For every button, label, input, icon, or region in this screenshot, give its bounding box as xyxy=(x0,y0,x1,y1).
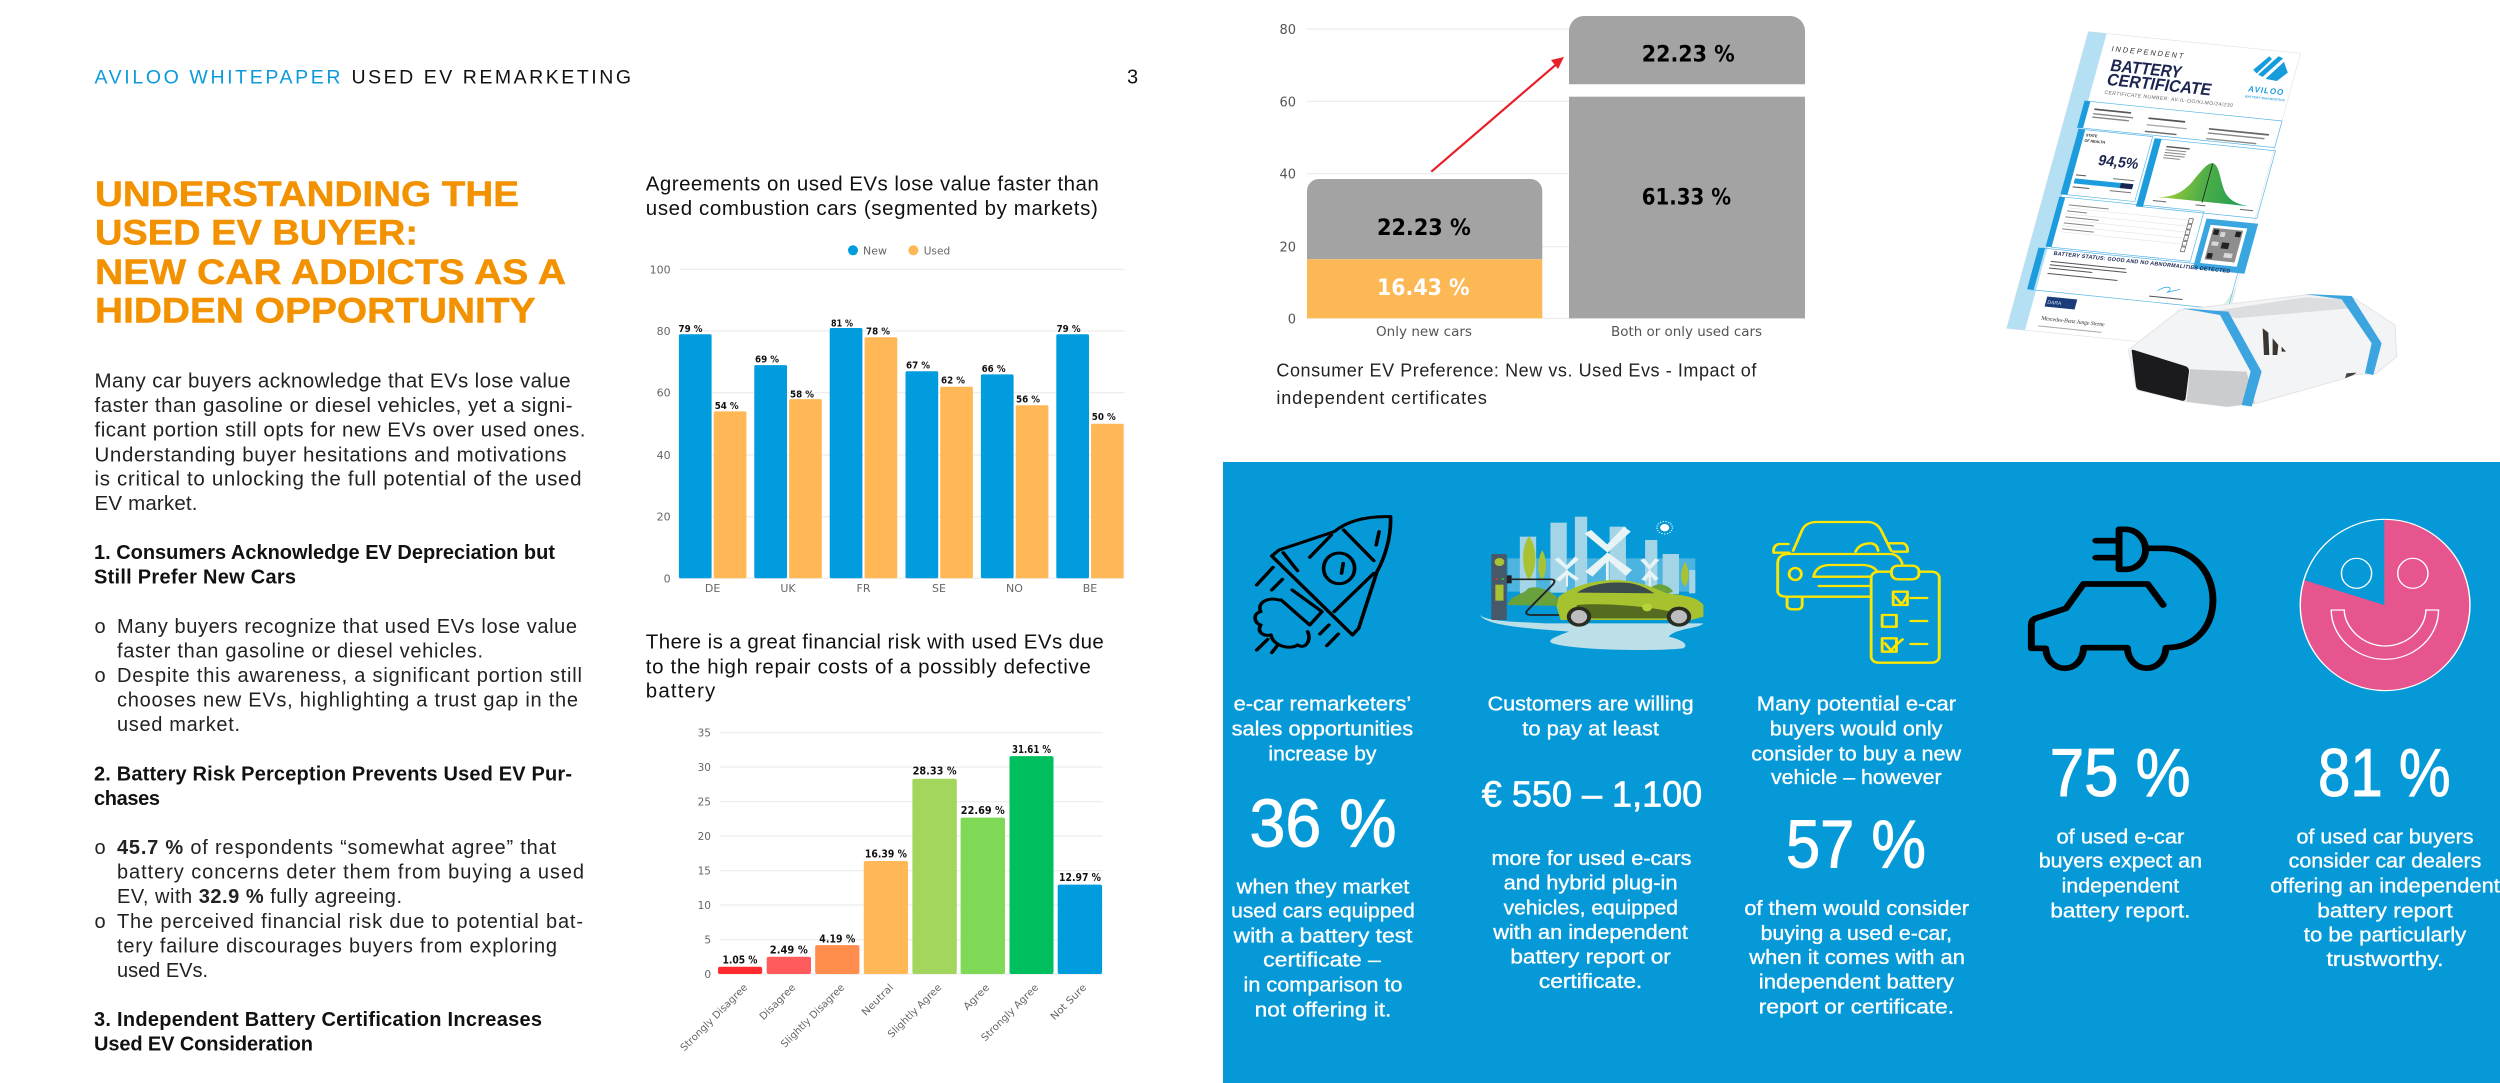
value labels xyxy=(722,744,1101,966)
illustration: battery certificate: CERTIFICATE xyxy=(2105,70,2214,99)
value labels: 31.61 % xyxy=(1012,744,1051,756)
stat column 1: 36 %: used cars equipped xyxy=(1231,901,1415,923)
bar chart: agreements by market xyxy=(650,244,1124,595)
value labels: 12.97 % xyxy=(1059,872,1101,884)
rotated category labels: Slightly Disagree xyxy=(779,982,847,1050)
chart legend xyxy=(848,244,950,257)
y axis labels xyxy=(1279,23,1296,328)
section 2 bullets: o xyxy=(94,911,106,933)
x axis labels: DE xyxy=(705,582,720,595)
y axis labels: 60 xyxy=(657,387,671,400)
chart caption xyxy=(1276,361,1757,408)
illustration: battery test device xyxy=(2128,294,2397,407)
rotated category labels: Not Sure xyxy=(1049,982,1089,1023)
y axis labels: 20 xyxy=(1279,240,1296,256)
page header: USED EV REMARKETING xyxy=(352,66,631,88)
stat column 3: 57 %: report or certificate. xyxy=(1759,996,1954,1018)
section 1 bullets: faster than gasoline or diesel vehicles. xyxy=(117,641,483,663)
stat column 1: 36 %: 36 % xyxy=(1250,786,1396,862)
y axis labels: 80 xyxy=(657,325,671,338)
section 2 heading: chases xyxy=(94,788,160,810)
title: NEW CAR ADDICTS AS A xyxy=(95,252,566,292)
stat column 1: 36 %: when they market xyxy=(1236,876,1410,898)
illustration: battery certificate: OF HEALTH xyxy=(2084,139,2106,145)
rotated category labels: Neutral xyxy=(860,982,896,1018)
section 1 bullets: o xyxy=(94,665,106,687)
stat column 3: 57 %: buying a used e-car, xyxy=(1761,923,1952,945)
title: USED EV BUYER: xyxy=(95,213,418,253)
value labels xyxy=(678,318,1116,423)
section 2 heading: 2. Battery Risk Perception Prevents Used EV Pur- xyxy=(94,763,572,785)
value labels: 56 % xyxy=(1016,395,1040,406)
stat column 1: 36 %: e-car remarketers’ xyxy=(1234,694,1411,716)
x axis labels: SE xyxy=(932,582,946,595)
stat column 4: 75 %: independent xyxy=(2062,876,2180,898)
panel: statistics xyxy=(1223,462,2500,1083)
stat column 5: 81 % xyxy=(2270,735,2500,971)
chart 1 heading: used combustion cars (segmented by markets) xyxy=(646,197,1098,220)
rotated category labels: Disagree xyxy=(758,982,798,1023)
bar: both or only used cars: 22.23 % xyxy=(1642,41,1735,67)
stat column 3: 57 %: Many potential e-car xyxy=(1757,694,1956,716)
icon: rocket xyxy=(1255,517,1391,653)
bar: both or only used cars xyxy=(1569,16,1805,318)
section 2 bullets: EV, with 32.9 % fully agreeing. xyxy=(117,886,402,908)
section 3 heading: Used EV Consideration xyxy=(94,1034,313,1056)
chart 2 heading: battery xyxy=(646,679,716,702)
intro paragraph: is critical to unlocking the full potential of the used xyxy=(94,468,582,491)
stat column 5: 81 %: of used car buyers xyxy=(2296,826,2474,848)
y axis labels: 5 xyxy=(704,935,711,947)
stat column 4: 75 % xyxy=(2039,735,2202,922)
y axis labels: 30 xyxy=(698,762,711,774)
y axis labels xyxy=(698,728,711,981)
y axis labels xyxy=(650,263,671,585)
stat column 1: 36 %: certificate – xyxy=(1263,950,1382,972)
y axis labels: 10 xyxy=(698,900,711,912)
value labels: 81 % xyxy=(831,318,853,329)
value labels: 62 % xyxy=(941,375,965,386)
chart legend: New xyxy=(863,244,887,257)
title: UNDERSTANDING THE xyxy=(95,174,519,214)
rotated category labels: Strongly Disagree xyxy=(679,982,750,1054)
y axis labels: 0 xyxy=(1288,312,1296,328)
y axis labels: 60 xyxy=(1279,96,1296,110)
section 2 heading xyxy=(94,763,572,810)
chart 1 heading xyxy=(646,173,1099,220)
stat column 3: 57 %: vehicle – however xyxy=(1771,767,1942,789)
section 2 bullets: battery concerns deter them from buying a used xyxy=(117,862,584,884)
x axis labels: BE xyxy=(1083,582,1097,595)
x axis labels xyxy=(1376,325,1762,340)
value labels: 2.49 % xyxy=(770,944,808,956)
y axis labels: 40 xyxy=(657,449,671,462)
value labels: 22.69 % xyxy=(961,805,1005,817)
arrow: shift towards used cars xyxy=(1431,57,1564,172)
y axis labels: 0 xyxy=(704,969,711,981)
value labels: 69 % xyxy=(755,354,779,365)
stat column 4: 75 %: buyers expect an xyxy=(2039,851,2202,873)
stat column 2: price premium: Customers are willing xyxy=(1488,694,1694,716)
section 3 heading xyxy=(94,1009,542,1056)
section 1 bullets: chooses new EVs, highlighting a trust gap in the xyxy=(117,690,578,712)
bar: only new cars xyxy=(1307,179,1542,318)
value labels: 79 % xyxy=(1057,324,1081,335)
x axis labels: UK xyxy=(780,582,796,595)
section 2 bullets: 45.7 % of respondents “somewhat agree” that xyxy=(117,837,556,859)
section 1 heading: 1. Consumers Acknowledge EV Depreciation but xyxy=(94,542,555,564)
stat column 2: price premium: certificate. xyxy=(1539,971,1642,993)
illustration: battery certificate: INDEPENDENT xyxy=(2111,44,2185,60)
chart 2 heading xyxy=(646,630,1104,702)
stat column 1: 36 %: in comparison to xyxy=(1244,975,1402,997)
page header: 3 xyxy=(1127,66,1138,88)
section 1 heading: Still Prefer New Cars xyxy=(94,567,296,589)
y axis labels: 25 xyxy=(698,797,711,809)
illustration: battery certificate: BATTERY STATUS: GOOD AND NO ABNORMALITIES DETECTED xyxy=(2053,251,2231,275)
rotated category labels: Strongly Agree xyxy=(980,982,1041,1044)
illustration: battery certificate: BATTERY DIAGNOSTICS xyxy=(2245,94,2285,102)
intro paragraph: EV market. xyxy=(94,492,198,515)
bar: only new cars: 22.23 % xyxy=(1377,215,1471,241)
illustration: battery certificate: 94,5% xyxy=(2096,152,2141,173)
value labels: 1.05 % xyxy=(722,954,758,966)
x axis labels: Both or only used cars xyxy=(1611,325,1762,340)
stat column 5: 81 %: to be particularly xyxy=(2304,925,2466,947)
icon: smiley pie chart xyxy=(2300,519,2470,691)
section 2 bullets: used EVs. xyxy=(117,960,208,982)
intro paragraph: Understanding buyer hesitations and motivations xyxy=(94,443,566,466)
chart legend: Used xyxy=(924,244,950,257)
stat column 3: 57 %: 57 % xyxy=(1786,806,1926,882)
value labels: 50 % xyxy=(1092,412,1116,423)
section 1 bullets: Many buyers recognize that used EVs lose value xyxy=(117,616,577,638)
x axis labels: FR xyxy=(857,582,871,595)
bar: both or only used cars: 61.33 % xyxy=(1642,184,1731,210)
stat column 5: 81 %: 81 % xyxy=(2318,735,2451,811)
section 2 bullets: tery failure discourages buyers from exploring xyxy=(117,936,557,958)
value labels: 28.33 % xyxy=(913,766,957,778)
stat column 1: 36 %: not offering it. xyxy=(1255,999,1391,1021)
chart caption: independent certificates xyxy=(1276,388,1487,408)
value labels: 4.19 % xyxy=(819,933,856,945)
page header: AVILOO WHITEPAPER xyxy=(94,66,340,88)
section 1 bullets: o xyxy=(94,616,106,638)
stat column 3: 57 %: of them would consider xyxy=(1744,898,1969,920)
bars xyxy=(679,328,1124,578)
stat column 3: 57 %: consider to buy a new xyxy=(1751,743,1962,765)
stat column 1: 36 %: increase by xyxy=(1268,743,1376,765)
chart 1 heading: Agreements on used EVs lose value faster than xyxy=(646,173,1099,196)
bar chart: financial risk agreement xyxy=(679,728,1103,1054)
stat column 3: 57 %: when it comes with an xyxy=(1748,947,1965,969)
stat column 2: price premium: € 550 – 1,100 xyxy=(1482,774,1702,815)
x axis labels: Only new cars xyxy=(1376,325,1472,340)
y axis labels: 40 xyxy=(1279,168,1296,182)
chart caption: Consumer EV Preference: New vs. Used Evs - Impact of xyxy=(1276,361,1757,381)
stacked bar chart: new vs used preference xyxy=(1279,16,1805,340)
illustration: battery certificate: STATE xyxy=(2085,133,2098,138)
icon: car with checklist xyxy=(1774,522,1939,663)
stat column 5: 81 %: consider car dealers xyxy=(2289,851,2481,873)
illustration: battery certificate: CERTIFICATE NUMBER: AV-IL-OO/KLMO/24/230 xyxy=(2104,90,2234,109)
stat column 4: 75 %: battery report. xyxy=(2050,900,2190,922)
y axis labels: 0 xyxy=(664,572,671,585)
y axis labels: 20 xyxy=(657,511,671,524)
title: HIDDEN OPPORTUNITY xyxy=(95,291,536,331)
chart 2 heading: to the high repair costs of a possibly defective xyxy=(646,655,1091,678)
illustration: battery certificate: AVILOO xyxy=(2247,85,2285,97)
intro paragraph: Many car buyers acknowledge that EVs lose value xyxy=(94,370,570,393)
y axis labels: 100 xyxy=(650,263,671,276)
y axis labels: 35 xyxy=(698,728,711,740)
icon: electric car at charging station xyxy=(1480,517,1703,650)
illustration: battery certificate: DARA xyxy=(2046,300,2063,307)
stat column 3: 57 %: buyers would only xyxy=(1770,719,1942,741)
section 1 heading xyxy=(94,542,555,589)
intro paragraph: ficant portion still opts for new EVs over used ones. xyxy=(94,419,586,442)
stat column 1: 36 %: sales opportunities xyxy=(1232,719,1413,741)
stat column 5: 81 %: offering an independent xyxy=(2270,876,2500,898)
bars xyxy=(718,756,1102,974)
stat column 4: 75 %: 75 % xyxy=(2050,735,2191,811)
section 1 bullets: used market. xyxy=(117,714,240,736)
stat column 2: price premium: vehicles, equipped xyxy=(1504,897,1678,919)
value labels: 66 % xyxy=(982,364,1006,375)
icon: plug-in electric car xyxy=(2031,529,2213,668)
x axis labels: NO xyxy=(1006,582,1023,595)
section 1 bullets xyxy=(94,616,582,736)
stat column 1: 36 % xyxy=(1231,694,1415,1021)
illustration: battery certificate xyxy=(2007,32,2305,350)
stat column 5: 81 %: battery report xyxy=(2317,900,2453,922)
section 1 bullets: Despite this awareness, a significant portion still xyxy=(117,665,582,687)
section 2 bullets xyxy=(94,837,584,982)
stat column 3: 57 %: independent battery xyxy=(1759,971,1954,993)
page header xyxy=(94,66,1138,88)
rotated category labels xyxy=(679,982,1089,1054)
chart 2 heading: There is a great financial risk with used EVs due xyxy=(646,630,1104,653)
intro paragraph: faster than gasoline or diesel vehicles, yet a signi- xyxy=(94,394,572,417)
intro paragraph xyxy=(94,370,586,515)
stat column 5: 81 %: trustworthy. xyxy=(2326,949,2444,971)
section 2 bullets: The perceived financial risk due to potential bat- xyxy=(117,911,583,933)
value labels: 79 % xyxy=(678,324,702,335)
y axis labels: 20 xyxy=(698,831,711,843)
x axis labels xyxy=(705,582,1097,595)
y axis labels: 80 xyxy=(1279,23,1296,38)
stat column 2: price premium: more for used e-cars xyxy=(1492,848,1692,870)
stat column 2: price premium: with an independent xyxy=(1492,922,1688,944)
title xyxy=(95,174,566,331)
section 2 bullets: o xyxy=(94,837,106,859)
value labels: 16.39 % xyxy=(865,848,907,860)
value labels: 58 % xyxy=(790,389,814,400)
stat column 2: price premium: and hybrid plug-in xyxy=(1504,872,1678,894)
stat column 2: price premium xyxy=(1482,694,1702,993)
value labels: 54 % xyxy=(715,401,739,412)
bar: only new cars: 16.43 % xyxy=(1377,275,1470,301)
rotated category labels: Agree xyxy=(962,982,992,1013)
stat column 1: 36 %: with a battery test xyxy=(1232,925,1413,947)
stat column 4: 75 %: of used e-car xyxy=(2056,826,2185,848)
value labels: 67 % xyxy=(906,360,930,371)
stat column 2: price premium: battery report or xyxy=(1510,946,1671,968)
illustration: battery certificate: BATTERY xyxy=(2108,56,2185,82)
section 3 heading: 3. Independent Battery Certification Increases xyxy=(94,1009,542,1031)
illustration: battery certificate: Mercedes-Benz Junge Sterne xyxy=(2040,316,2106,328)
y axis labels: 15 xyxy=(698,866,711,878)
stat column 3: 57 % xyxy=(1744,694,1969,1018)
stat column 2: price premium: to pay at least xyxy=(1522,719,1659,741)
rotated category labels: Slightly Agree xyxy=(886,982,944,1040)
value labels: 78 % xyxy=(866,327,890,338)
